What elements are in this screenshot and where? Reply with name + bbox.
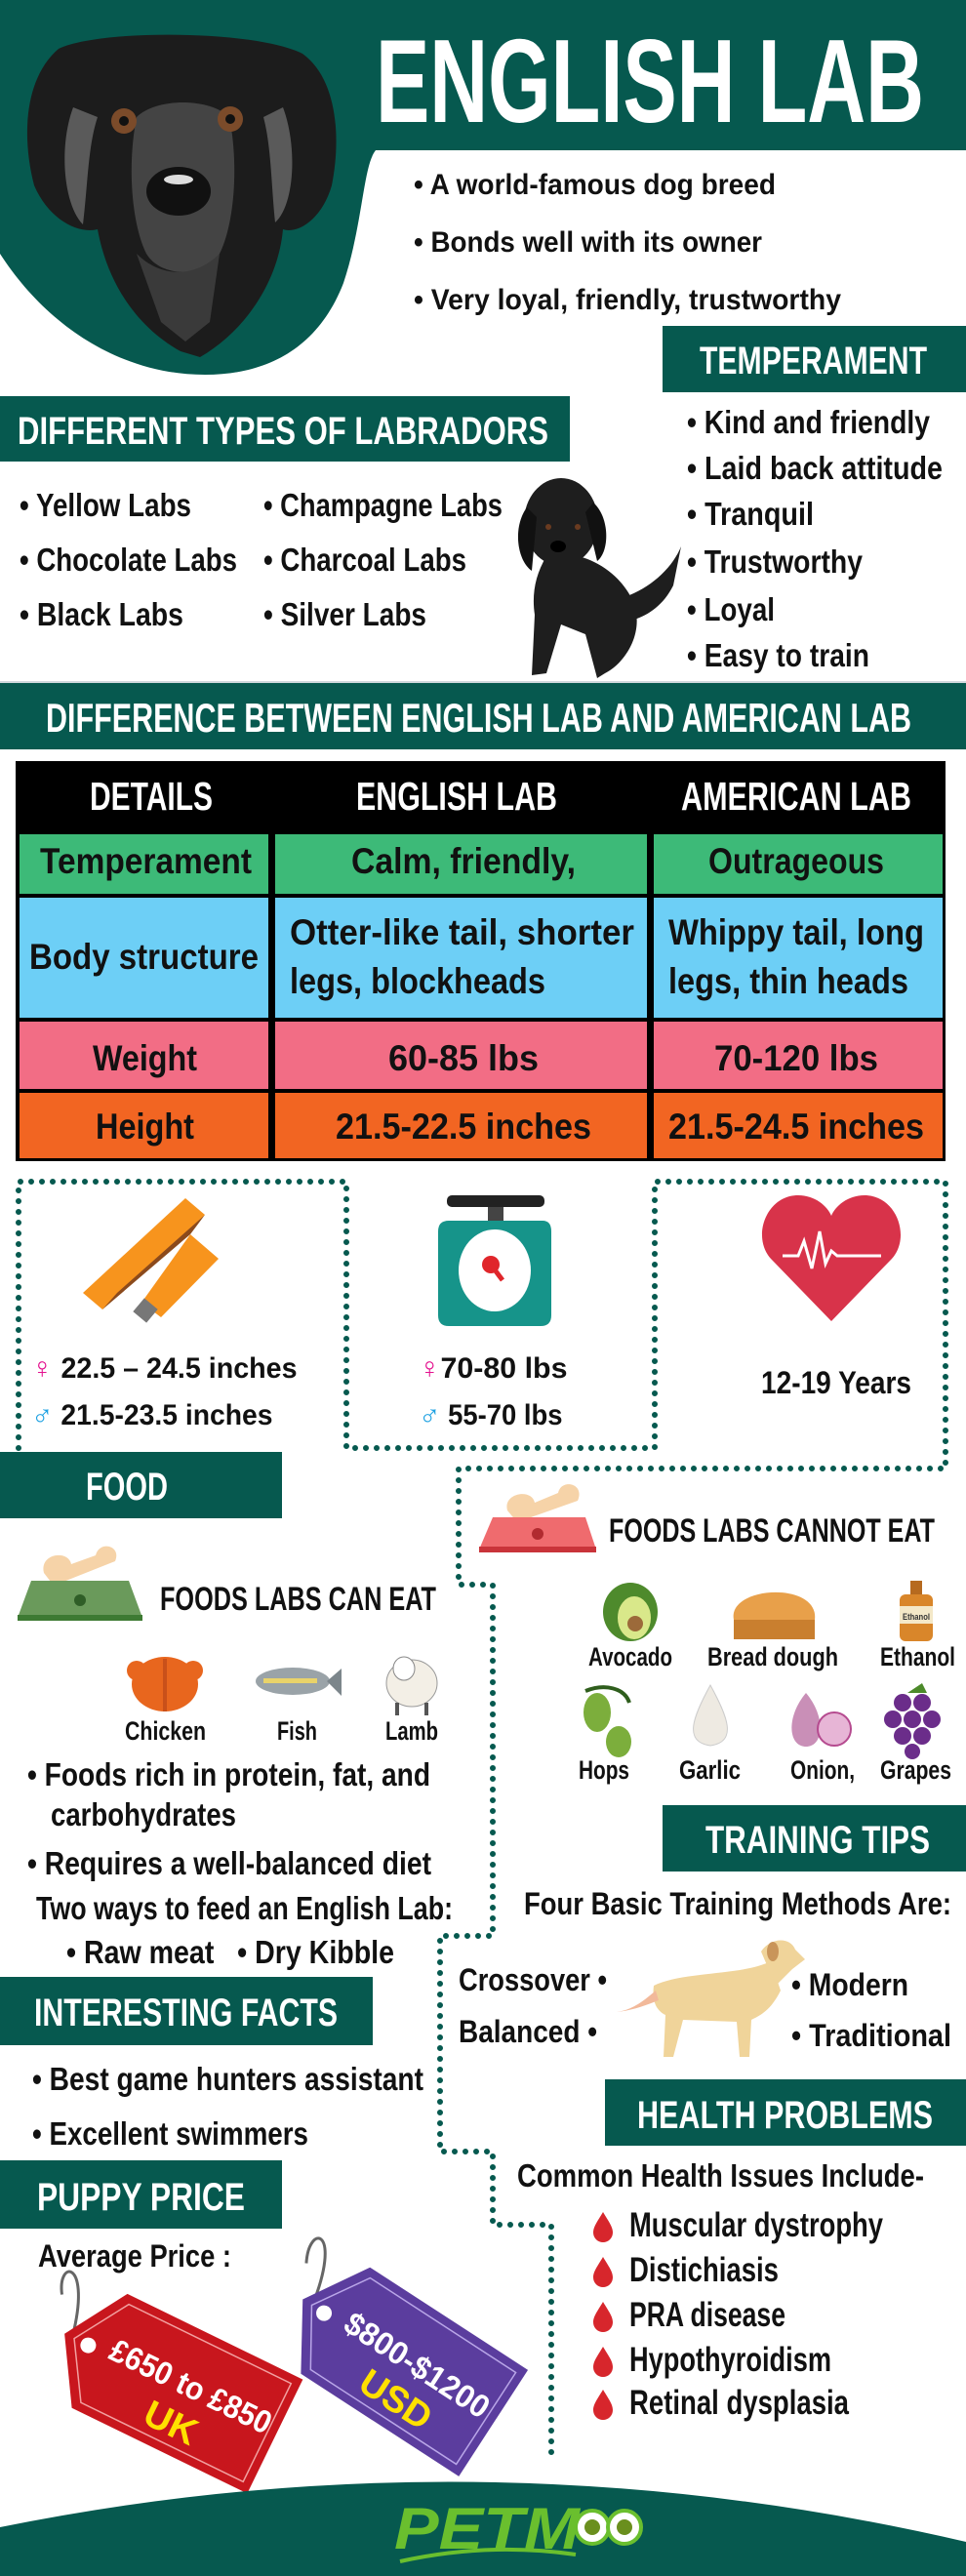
heading: puppy price: PUPPY PRICE — [37, 2176, 245, 2219]
temperament list: • Loyal — [687, 591, 775, 627]
comparison table: 21.5-22.5 inches — [336, 1107, 591, 1147]
temperament list: • Trustworthy — [687, 543, 864, 580]
icon: red bowl — [479, 1484, 596, 1552]
icon: grapes — [884, 1683, 941, 1759]
health text: Muscular dystrophy — [629, 2206, 883, 2244]
temperament list: • Kind and friendly — [687, 404, 931, 440]
icon: yellow dog — [617, 1940, 805, 2057]
facts list — [32, 2061, 423, 2152]
temperament list: • Easy to train — [687, 637, 869, 673]
lifespan: 12-19 Years — [761, 1365, 911, 1400]
comparison table: legs, thin heads — [668, 961, 908, 1001]
icon: scale — [438, 1195, 551, 1326]
height stats: ♂ 21.5-23.5 inches — [31, 1399, 273, 1431]
food text: Two ways to feed an English Lab: — [36, 1890, 453, 1926]
cannot eat labels: Hops — [579, 1755, 629, 1785]
comparison table: Temperament — [40, 841, 252, 881]
height stats: ♀ 22.5 – 24.5 inches — [31, 1352, 297, 1385]
heading: food: FOOD — [86, 1466, 168, 1509]
icon: green bowl — [18, 1547, 142, 1621]
food text: carbohydrates — [51, 1796, 236, 1832]
health text — [517, 2157, 924, 2422]
icon: heart — [762, 1195, 901, 1321]
comparison table: Outrageous — [708, 841, 884, 881]
icon: avocado — [603, 1583, 658, 1641]
comparison table: 70-120 lbs — [714, 1038, 878, 1078]
can eat labels: Chicken — [125, 1716, 206, 1746]
heading: health problems — [605, 2079, 966, 2146]
icon: dog head — [27, 35, 337, 357]
comparison table: Otter-like tail, shorter — [290, 912, 634, 952]
temperament list: • Tranquil — [687, 496, 814, 532]
heading: interesting facts — [0, 1977, 373, 2045]
icon: bread — [734, 1592, 815, 1639]
types list: • Black Labs — [20, 596, 183, 632]
cannot eat labels: Bread dough — [707, 1642, 838, 1671]
heading: temperament — [663, 326, 966, 392]
intro bullets — [414, 169, 841, 316]
icon: lamb — [386, 1657, 437, 1715]
logo: petmoo — [394, 2496, 641, 2561]
weight stats: ♂ 55-70 lbs — [419, 1399, 562, 1431]
training text: Crossover • — [459, 1962, 607, 1997]
price tag: UK: UK — [137, 2394, 205, 2454]
facts list: • Excellent swimmers — [32, 2115, 308, 2152]
food text: • Requires a well-balanced diet — [27, 1845, 431, 1881]
icon: onion — [791, 1693, 851, 1747]
cannot eat icons — [584, 1581, 941, 1759]
comparison table — [16, 761, 946, 1161]
comparison table: DETAILS — [90, 774, 213, 819]
training text: Balanced • — [459, 2014, 597, 2049]
training text: • Modern — [791, 1967, 908, 2002]
intro bullets: • Very loyal, friendly, trustworthy — [414, 284, 841, 316]
facts list: • Best game hunters assistant — [32, 2061, 423, 2097]
comparison table: legs, blockheads — [290, 961, 545, 1001]
cannot eat labels — [579, 1642, 955, 1785]
training text — [459, 1886, 951, 2053]
icon: ethanol bottle — [900, 1581, 933, 1641]
height stats — [31, 1352, 297, 1431]
price tag: USD — [249, 2234, 528, 2476]
comparison table: Weight — [93, 1038, 197, 1078]
heading: food — [0, 1452, 282, 1518]
comparison table: Body structure — [29, 937, 259, 977]
price tag: UK: £650 to £850 — [104, 2331, 278, 2441]
can eat labels: Lamb — [385, 1716, 438, 1746]
types list: • Chocolate Labs — [20, 542, 237, 578]
health text: Hypothyroidism — [629, 2341, 831, 2379]
types list: • Yellow Labs — [20, 487, 191, 523]
cannot eat labels: Avocado — [588, 1642, 672, 1671]
can eat labels: Fish — [277, 1716, 317, 1746]
comparison table: Calm, friendly, — [351, 841, 576, 881]
cannot eat labels: Garlic — [679, 1755, 741, 1785]
health text: Retinal dysplasia — [629, 2384, 849, 2422]
heading: difference — [0, 683, 966, 749]
footer arch — [0, 2481, 966, 2576]
comparison table: ENGLISH LAB — [356, 774, 557, 819]
types list — [20, 487, 503, 632]
temperament list — [687, 404, 943, 673]
comparison table: 60-85 lbs — [388, 1038, 539, 1078]
price tag: USD: $800-$1200 — [338, 2305, 497, 2426]
comparison table: 21.5-24.5 inches — [668, 1107, 924, 1147]
food text: • Foods rich in protein, fat, and — [27, 1756, 430, 1792]
subheading: can eat: FOODS LABS CAN EAT — [160, 1581, 436, 1618]
heading: training tips — [663, 1805, 966, 1872]
icon: measuring tape — [83, 1198, 219, 1323]
health text: Distichiasis — [629, 2251, 779, 2289]
heading: different types: DIFFERENT TYPES OF LABRADORS — [18, 410, 548, 453]
heading: interesting facts: INTERESTING FACTS — [34, 1992, 338, 2034]
icon: hops — [584, 1687, 631, 1757]
types list: • Charcoal Labs — [263, 542, 466, 578]
types list: • Champagne Labs — [263, 487, 503, 523]
header band with blob — [0, 0, 966, 375]
comparison table: Whippy tail, long — [668, 912, 924, 952]
icon: black puppy — [518, 478, 681, 678]
icon: garlic — [694, 1685, 727, 1746]
can eat labels — [125, 1716, 438, 1746]
icon: ethanol bottle: Ethanol — [903, 1612, 930, 1622]
intro bullets: • Bonds well with its owner — [414, 226, 762, 259]
weight stats — [419, 1352, 568, 1431]
training text: • Traditional — [791, 2018, 951, 2053]
comparison table: Height — [96, 1107, 194, 1147]
types list: • Silver Labs — [263, 596, 426, 632]
cannot eat labels: Onion, — [790, 1755, 855, 1785]
logo: petmoo: PETM — [394, 2496, 582, 2561]
weight stats: ♀70-80 lbs — [419, 1352, 568, 1385]
price tag: USD: USD — [351, 2361, 439, 2438]
heading: different types — [0, 396, 570, 462]
intro bullets: • A world-famous dog breed — [414, 169, 776, 201]
average price label: Average Price : — [38, 2238, 231, 2274]
health text: PRA disease — [629, 2296, 785, 2334]
price tag: UK — [14, 2266, 302, 2493]
dotted connector lines — [19, 1182, 946, 2461]
food text — [27, 1756, 453, 1970]
heading: puppy price — [0, 2160, 282, 2229]
food text: • Raw meat • Dry Kibble — [66, 1934, 394, 1970]
icon: fish — [256, 1668, 342, 1696]
icons: blood drops — [593, 2212, 613, 2420]
icon: chicken — [127, 1657, 203, 1711]
